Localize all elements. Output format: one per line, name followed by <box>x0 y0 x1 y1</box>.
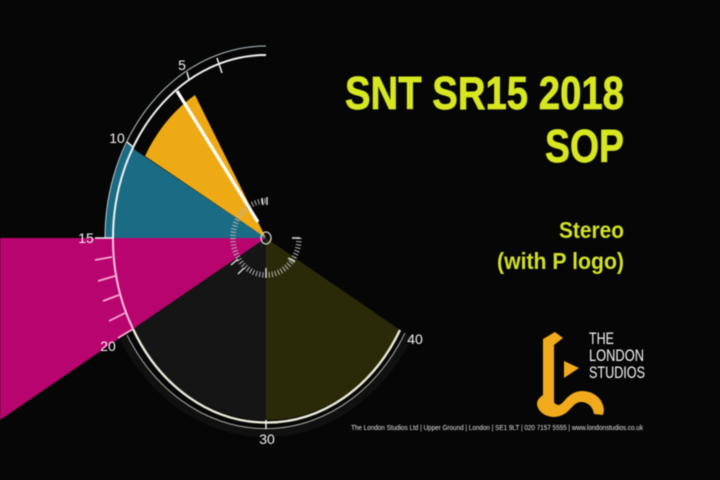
centre ring <box>261 232 271 244</box>
outer arc upper <box>105 46 266 238</box>
title: SOP <box>545 120 624 172</box>
title <box>345 67 624 172</box>
dial numerals: 40 <box>407 331 423 347</box>
subtitle: (with P logo) <box>497 248 624 274</box>
title: SNT SR15 2018 <box>345 67 624 119</box>
wedge: olive <box>266 238 400 420</box>
inner arc upper <box>113 55 266 238</box>
wedge: teal <box>105 143 266 238</box>
footer address: The London Studios Ltd | Upper Ground | London | SE1 9LT | 020 7157 5555 | www.londonstudios.co.uk <box>351 423 643 432</box>
logo mark <box>537 332 604 417</box>
logo triangle <box>564 361 579 378</box>
inner arc pink segment <box>113 238 133 329</box>
dial numerals: 15 <box>78 230 94 246</box>
logo wordmark: THE <box>589 330 614 348</box>
wedge: yellow <box>145 95 266 238</box>
dial numerals: 10 <box>109 130 125 146</box>
subtitle <box>497 217 624 274</box>
tick marks: pink minutes <box>95 257 133 338</box>
marker: white hand <box>177 91 258 222</box>
logo wordmark <box>589 330 645 382</box>
dial numerals: 20 <box>100 338 116 354</box>
inner arc lower <box>133 329 400 423</box>
wedge: dark grey <box>133 238 266 420</box>
panel: clock dial <box>0 46 423 447</box>
wedge: magenta <box>0 238 266 420</box>
dial numerals <box>78 57 423 447</box>
logo: The London Studios <box>537 330 645 417</box>
logo wordmark: STUDIOS <box>589 364 645 382</box>
wedge: dim halo band <box>120 333 412 437</box>
inner seconds gauge <box>231 197 300 278</box>
logo wordmark: LONDON <box>589 347 644 365</box>
outer arc lower <box>127 333 405 429</box>
dial numerals: 30 <box>259 431 275 447</box>
dial numerals: 5 <box>178 57 186 73</box>
tick marks: major <box>95 58 266 429</box>
subtitle: Stereo <box>559 217 624 243</box>
